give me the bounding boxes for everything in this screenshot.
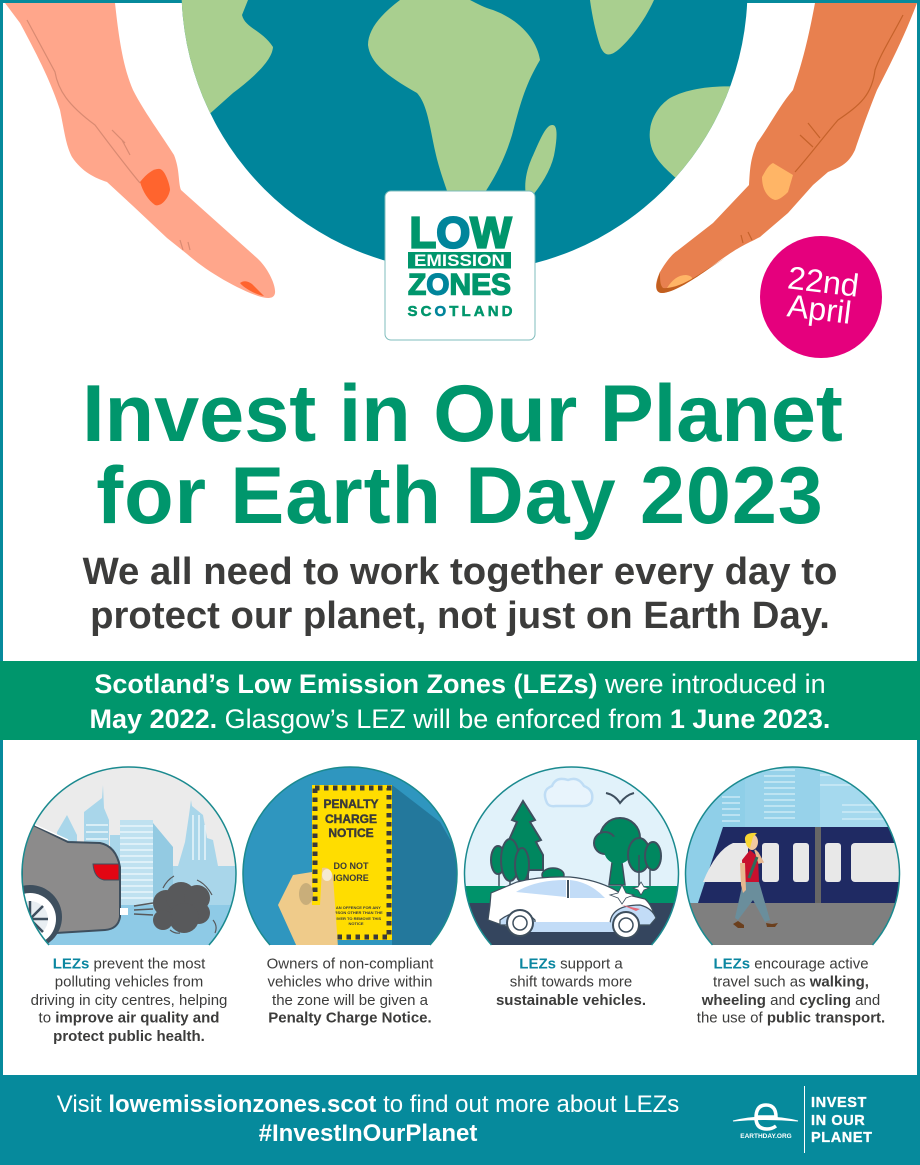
globe [170,0,760,280]
text: penalty charge notice: the zone will be given a [272,992,429,1009]
illustration: hand holding penalty notice: PENALTY [323,797,379,811]
invest in our planet logo text: INVEST [811,1095,867,1111]
text: sustainable vehicles: sustainable vehicles. [496,992,646,1009]
subtitle: protect our planet, not just on Earth Day. [90,594,830,637]
logo: Low Emission Zones Scotland: SCOTLAND [408,303,513,320]
text: prevent polluting vehicles: driving in city centres, helping [31,992,227,1009]
invest in our planet logo text: PLANET [811,1130,873,1146]
text: penalty charge notice: Owners of non-compliant [267,956,434,972]
earthday.org logo [733,1105,798,1140]
illustration: hand holding penalty notice: IGNORE [333,873,369,883]
logo: Low Emission Zones Scotland [385,191,535,340]
logo: Low Emission Zones Scotland: ZONES [408,268,511,302]
logo: Low Emission Zones Scotland: LOW [410,208,512,258]
title: for Earth Day 2023 [96,451,824,541]
date badge [760,236,882,358]
earthday.org logo: EARTHDAY.ORG [740,1133,792,1140]
panel: sustainable vehicles [460,765,685,1009]
illustration: hand holding penalty notice: DO NOT [334,861,369,871]
logo: Low Emission Zones Scotland: EMISSION [414,252,505,270]
illustration: hand holding penalty notice: PERSON OTHER THAN THE [329,910,383,915]
divider [804,1086,805,1153]
text: active travel: travel such as walking, [713,974,869,990]
text: penalty charge notice: Penalty Charge Notice. [268,1010,432,1026]
subtitle: We all need to work together every day to [83,550,837,593]
fingernail: knuckle patch [140,169,170,205]
footer call to action: Visit lowemissionzones.scot to find out more about LEZs [57,1091,679,1118]
footer [0,1075,920,1165]
illustration: hand holding penalty notice: IS AN OFFENCE FOR ANY [331,905,381,910]
text: penalty charge notice: vehicles who drive within [267,974,433,990]
text: active travel: the use of public transport. [697,1010,885,1026]
green info band [0,661,920,740]
text: sustainable vehicles: LEZs support a [519,956,623,972]
panel: penalty charge notice [240,765,462,1026]
date badge: April [785,287,853,331]
illustration: hand holding penalty notice [240,765,462,947]
text: prevent polluting vehicles: to improve air quality and [39,1010,219,1026]
illustration: clean car with trees [460,765,685,948]
text: active travel: wheeling and cycling and [702,992,880,1009]
text: sustainable vehicles: shift towards more [510,974,632,990]
panel: prevent polluting vehicles [21,766,237,1044]
illustration: hand holding penalty notice: NOTICE [348,921,364,926]
illustration: car exhaust in city [21,766,237,946]
text: prevent polluting vehicles: LEZs prevent the most [53,956,205,972]
illustration: hand holding penalty notice: CHARGE [325,812,377,826]
illustration: person walking past train [680,765,905,948]
illustration: hand holding penalty notice: NOTICE [328,826,374,840]
title: Invest in Our Planet [82,369,843,459]
panel: active travel [680,765,905,1026]
date badge: 22nd [786,259,861,304]
footer call to action: #InvestInOurPlanet [259,1120,477,1147]
text: prevent polluting vehicles: protect public health. [53,1028,205,1045]
title [82,369,843,541]
right hand [656,3,917,293]
text: active travel: LEZs encourage active [713,956,869,972]
left hand [5,3,275,298]
green info band: May 2022. Glasgow’s LEZ will be enforced from 1 June 2023. [90,704,830,734]
illustration: hand holding penalty notice: DRIVER TO REMOVE THIS [331,916,382,921]
invest in our planet logo text: IN OUR [811,1113,865,1129]
text: prevent polluting vehicles: polluting vehicles from [55,974,203,990]
green info band: Scotland’s Low Emission Zones (LEZs) were introduced in [94,669,826,699]
